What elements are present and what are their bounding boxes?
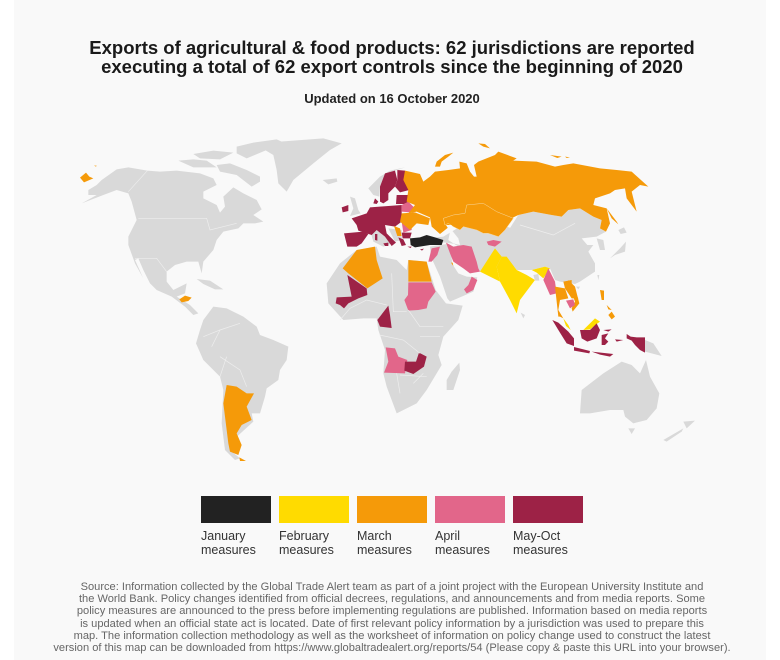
Canadian Arctic islands (178, 159, 217, 167)
legend swatch: March (357, 496, 427, 523)
Ukraine (400, 212, 430, 230)
Philippines (600, 290, 604, 300)
source note: Source: Information collected by the Global Trade Alert team as part of a joint project with the European University Institute and (81, 581, 703, 593)
Iceland (323, 178, 337, 184)
legend swatch: January (201, 496, 271, 523)
legend label: February (279, 529, 334, 556)
legend label: February: February (279, 529, 329, 543)
Cameroon (377, 306, 392, 328)
Oman (464, 277, 477, 293)
Sudan (404, 282, 436, 311)
Novaya Zemlya (435, 153, 453, 167)
legend label: May-Oct: measures (513, 542, 568, 556)
Bulgaria (402, 233, 412, 238)
Turkey (410, 235, 443, 247)
Kyrgyzstan (487, 240, 502, 247)
Honduras (179, 296, 192, 302)
Egypt (408, 260, 432, 282)
Australia (580, 360, 659, 423)
Peninsular Malaysia (563, 318, 571, 330)
Kazakhstan (443, 203, 513, 237)
legend label: March (357, 529, 412, 556)
source note: is updated when an official state act is located. Date of first relevant policy information by a jurisdiction was used to prepare this (80, 618, 704, 630)
Iran (446, 243, 480, 273)
Africa (327, 247, 477, 413)
legend label: March: March (357, 529, 392, 543)
Sarawak and Sabah (583, 318, 600, 330)
Madagascar (447, 363, 460, 390)
Sakhalin (607, 208, 618, 224)
Myanmar (543, 268, 557, 295)
Chukotka tip (80, 173, 93, 182)
Greenland (265, 138, 342, 192)
Russia (403, 152, 648, 237)
Baltics (396, 195, 408, 204)
Korea (597, 238, 605, 250)
Norway (368, 167, 405, 197)
Vietnam (568, 280, 579, 312)
legend swatch: May-Oct (513, 496, 583, 523)
Tasmania (628, 428, 635, 434)
Serbia (394, 226, 402, 236)
Greece (398, 237, 406, 246)
Argentina (223, 385, 254, 455)
legend label: March: measures (357, 542, 412, 556)
Kalimantan (580, 323, 600, 342)
Laos (563, 280, 578, 298)
borders (128, 171, 247, 387)
Zambia (404, 353, 427, 374)
Bangladesh (533, 274, 539, 281)
legend label: May-Oct: May-Oct (513, 529, 560, 543)
update date: Updated on 16 October 2020 (304, 91, 480, 106)
title (89, 37, 695, 77)
Algeria (343, 247, 383, 288)
Cuba (197, 279, 223, 289)
Romania (402, 222, 412, 233)
source note: version of this map can be downloaded from https://www.globaltradealert.org/reports/54 (Please copy & paste this URL into your browser). (53, 642, 731, 654)
Cyprus (420, 249, 424, 251)
small Gulf state (451, 263, 453, 266)
Mali (336, 275, 367, 308)
source note (53, 581, 731, 654)
Sri Lanka (521, 313, 525, 318)
gray base Eurasia (410, 227, 533, 272)
legend label: January: January (201, 529, 245, 543)
Thailand (555, 287, 568, 318)
source note: map. The information collection methodology as well as the worksheet of information on policy change used to construct the latest (74, 630, 710, 642)
title: executing a total of 62 export controls since the beginning of 2020 (101, 56, 683, 77)
Sumatra (552, 320, 574, 346)
title: Exports of agricultural & food products: 62 jurisdictions are reported (89, 37, 695, 58)
Mediterranean islands (375, 234, 377, 241)
Pakistan (480, 248, 502, 282)
Belarus (402, 202, 415, 213)
source note: policy measures are announced to the press before implementing regulations are published. Information based on media reports (77, 605, 707, 617)
legend label: April: April (435, 529, 460, 543)
Eurasia (342, 143, 648, 302)
Finland (395, 170, 409, 192)
Taiwan (597, 275, 599, 280)
source note: the World Bank. Policy changes identified from official decrees, regulations, and announcements and from media reports. Some (79, 593, 705, 605)
legend label: May-Oct (513, 529, 568, 556)
Papua (627, 334, 645, 353)
Central Europe gray (370, 228, 392, 247)
Cambodia (566, 299, 575, 308)
Sweden (380, 171, 397, 203)
China and Mongolia (467, 208, 627, 284)
Bhutan and northeast India (532, 267, 550, 278)
Angola (384, 347, 407, 373)
Spain and Portugal (344, 232, 368, 247)
Africa borders (340, 273, 443, 393)
legend label: April: measures (435, 542, 490, 556)
UK (350, 197, 361, 216)
legend label: February: measures (279, 542, 334, 556)
Afghanistan and Central Asia (453, 230, 513, 263)
Americas and Greenland (80, 138, 342, 461)
Arabian Peninsula (430, 244, 477, 302)
Indonesian islands (603, 329, 612, 332)
Japan (610, 242, 626, 258)
South and Southeast Asia, Oceania (480, 248, 695, 442)
legend label: January (201, 529, 256, 556)
Arctic islands (478, 143, 490, 148)
legend swatch: April (435, 496, 505, 523)
legend label: January: measures (201, 542, 256, 556)
Western Europe EU (352, 205, 402, 246)
Papua New Guinea (645, 340, 662, 356)
legend swatch: February (279, 496, 349, 523)
South America (196, 307, 288, 460)
India (497, 257, 535, 313)
Denmark (373, 198, 378, 204)
legend label: April (435, 529, 490, 556)
Java (574, 347, 590, 353)
Ireland (342, 205, 348, 212)
Caspian Sea (446, 225, 460, 245)
Jordan and Syria strip (428, 247, 440, 262)
New Zealand (683, 421, 695, 428)
Hainan (576, 287, 580, 289)
Sulawesi (602, 333, 608, 345)
